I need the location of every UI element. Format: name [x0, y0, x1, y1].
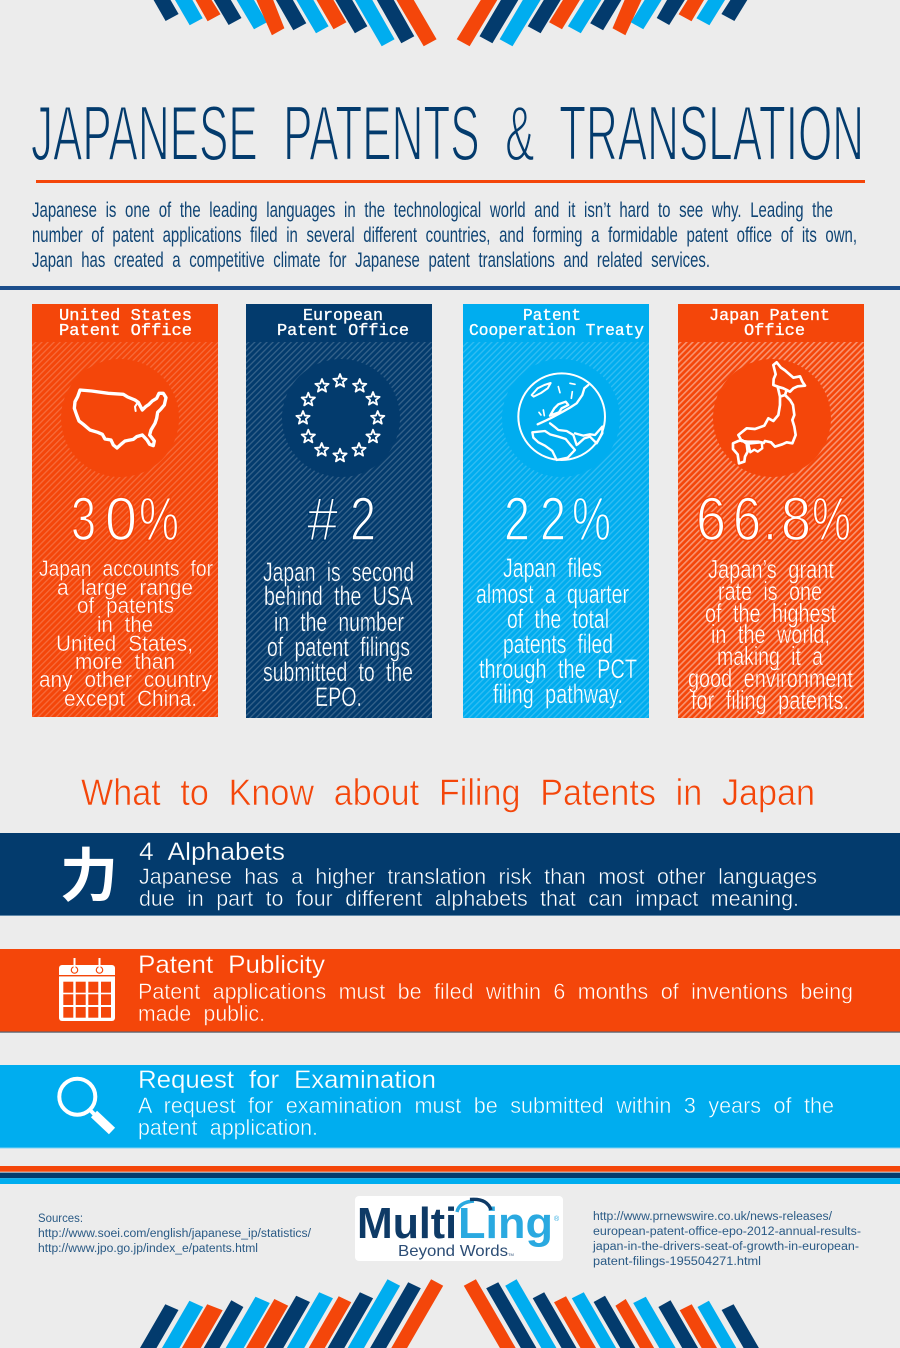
band text — [138, 1066, 834, 1140]
stat: 66.8%: 8 — [781, 485, 811, 553]
panel heading: USPTO: United States — [59, 307, 192, 326]
band text — [138, 951, 853, 1026]
body text: PCT: patents filed — [503, 629, 613, 659]
logo: MultiLing: TM — [508, 1252, 514, 1257]
body text: USPTO: except China. — [64, 686, 197, 711]
band text: Patent Publicity — [138, 951, 326, 979]
band text: patent application. — [138, 1115, 318, 1140]
sources right: japan-in-the-drivers-seat-of-growth-in-european- — [592, 1241, 859, 1253]
icon: USA map outline — [74, 390, 166, 448]
section heading: What to Know about Filing Patents in Japan — [81, 772, 815, 813]
stat: 30%: % — [139, 485, 179, 553]
body text: EPO — [263, 557, 414, 712]
icon: globe — [518, 373, 605, 460]
body text: EPO: Japan is second — [263, 557, 414, 587]
panel heading: JPO: Office — [744, 322, 805, 341]
body text: PCT: filing pathway. — [493, 679, 623, 709]
body text: PCT: almost a quarter — [476, 579, 629, 609]
body text: JPO: of the highest — [705, 598, 837, 628]
body text: EPO: submitted to the — [263, 657, 413, 687]
band text: 4 Alphabets — [139, 838, 285, 866]
panel heading: EPO — [277, 307, 409, 341]
top left ribbon fan — [154, 0, 437, 46]
sources right: http://www.prnewswire.co.uk/news-releases/ — [593, 1211, 833, 1223]
footer colour stripes — [0, 1166, 900, 1184]
stat: 22%: % — [572, 485, 611, 553]
panel heading: EPO: European — [303, 307, 383, 326]
panel heading: USPTO: Patent Office — [59, 322, 192, 341]
sources right: european-patent-office-epo-2012-annual-results- — [593, 1226, 861, 1238]
body text: EPO: behind the USA — [264, 581, 413, 611]
logo: MultiLing — [355, 1196, 563, 1261]
body text: PCT: Japan files — [503, 553, 602, 583]
body text: USPTO: of patents — [77, 593, 174, 618]
band text: due in part to four different alphabets that can impact meaning. — [139, 886, 799, 911]
logo: MultiLing: ® — [554, 1215, 560, 1223]
band: 4 Alphabets — [0, 829, 900, 916]
logo: MultiLing: Multi — [357, 1199, 457, 1248]
body text: USPTO: a large range — [57, 575, 193, 600]
panel heading: PCT — [469, 307, 644, 341]
panel: European Patent Office — [246, 304, 432, 718]
sources right — [592, 1211, 861, 1268]
body text: JPO — [688, 554, 854, 715]
band text: A request for examination must be submitted within 3 years of the — [138, 1093, 834, 1118]
sources right: patent-filings-195504271.html — [593, 1256, 761, 1268]
intro paragraph — [32, 199, 857, 272]
icon: magnifying glass — [59, 1079, 112, 1131]
body text: JPO: making it a — [717, 641, 823, 671]
stat: #2: 2 — [350, 485, 376, 553]
band text: Japanese has a higher translation risk than most other languages — [139, 864, 817, 889]
logo: MultiLing: Ling — [458, 1199, 553, 1248]
stat: 22% — [504, 485, 611, 553]
top right ribbon fan — [457, 0, 747, 46]
stat: 66.8%: 6 — [696, 485, 726, 553]
panel heading: USPTO — [59, 307, 192, 341]
icon: Japan map outline — [733, 362, 805, 463]
sources left: http://www.soei.com/english/japanese_ip/statistics/ — [38, 1228, 312, 1240]
panel: Patent Cooperation Treaty — [463, 304, 649, 718]
panel heading: PCT: Patent — [523, 307, 581, 326]
stat: #2 — [307, 485, 376, 553]
band: Request for Examination — [0, 1065, 900, 1148]
bottom left ribbon fan — [140, 1279, 443, 1348]
body text: USPTO: United States, — [56, 631, 193, 656]
body text: EPO: EPO. — [315, 682, 362, 712]
panel heading: EPO: Patent Office — [277, 322, 409, 341]
sources left: Sources: — [38, 1213, 83, 1225]
stat: 30%: 0 — [105, 485, 137, 553]
icon: ring of EU stars — [296, 374, 384, 461]
panel heading: JPO: Japan Patent — [709, 307, 830, 326]
body text: EPO: in the number — [274, 607, 404, 637]
bottom right ribbon fan — [464, 1279, 759, 1348]
stat: 66.8%: . — [763, 485, 777, 553]
body text: JPO: Japan’s grant — [708, 554, 835, 584]
panel: Japan Patent Office — [678, 304, 864, 718]
body text: USPTO: Japan accounts for — [39, 556, 213, 581]
band text — [139, 838, 817, 911]
panel heading: PCT: Cooperation Treaty — [469, 322, 644, 341]
icon: katakana character: 力 — [60, 829, 118, 913]
stat: 66.8% — [696, 485, 851, 553]
stat: 66.8%: % — [812, 485, 851, 553]
stat: 22%: 2 — [504, 485, 530, 553]
body text: JPO: good environment — [688, 663, 854, 693]
title underline — [36, 180, 865, 183]
stat: 30% — [71, 485, 179, 553]
body text: PCT: through the PCT — [479, 654, 637, 684]
band text: made public. — [138, 1001, 265, 1026]
stat: 30%: 3 — [71, 485, 96, 553]
icon: calendar — [59, 958, 115, 1021]
body text: USPTO: in the — [97, 612, 153, 637]
logo: MultiLing: Beyond Words — [398, 1243, 508, 1260]
body text: JPO: rate is one — [718, 576, 822, 606]
body text: PCT: of the total — [507, 604, 609, 634]
body text: USPTO — [39, 556, 213, 711]
body text: JPO: for filing patents. — [691, 685, 849, 715]
panel: United States Patent Office — [32, 304, 218, 717]
sources left — [38, 1213, 312, 1255]
band text: Patent applications must be filed within 6 months of inventions being — [138, 979, 853, 1004]
sources left: http://www.jpo.go.jp/index_e/patents.html — [38, 1243, 258, 1255]
band text: Request for Examination — [138, 1066, 436, 1094]
body text: USPTO: any other country — [39, 667, 212, 692]
body text: PCT — [476, 553, 637, 709]
body text: USPTO: more than — [75, 649, 175, 674]
stat: #2: # — [307, 485, 338, 553]
body text: EPO: of patent filings — [267, 632, 410, 662]
body text: JPO: in the world, — [711, 619, 830, 649]
panel heading: JPO — [709, 307, 830, 341]
stat: 66.8%: 6 — [733, 485, 761, 553]
stat: 22%: 2 — [540, 485, 566, 553]
band: Patent Publicity — [0, 949, 900, 1033]
